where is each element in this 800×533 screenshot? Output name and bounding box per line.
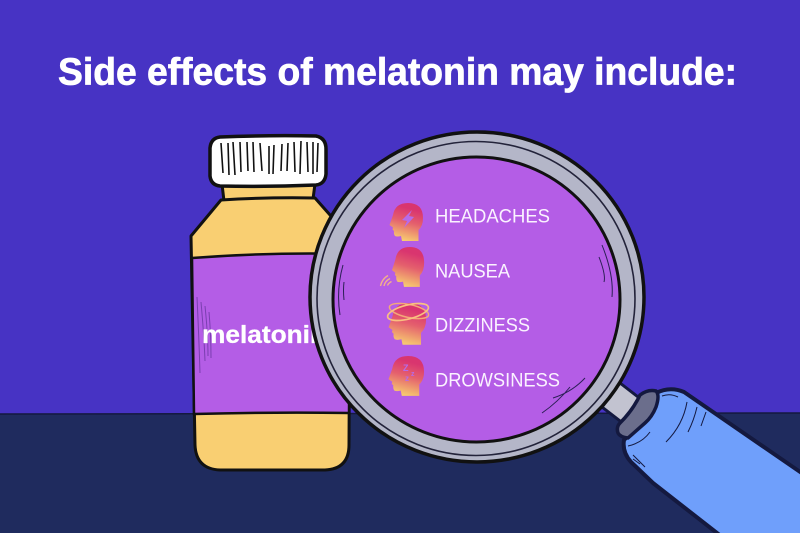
symptom: nausea [380, 247, 510, 287]
icon: head with lightning [390, 203, 423, 241]
icon: head with z letters: z [405, 374, 409, 383]
icon: head with z letters: z [411, 371, 415, 378]
label: NAUSEA [435, 260, 510, 282]
symptom: drowsiness [389, 356, 560, 396]
lens glass [333, 157, 620, 442]
label: DROWSINESS [435, 370, 560, 392]
bottle body [191, 198, 350, 470]
icon: head with z letters: Z [403, 363, 409, 373]
title: Side effects of melatonin may include: [58, 52, 737, 94]
melatonin bottle [191, 136, 350, 470]
handle grip [624, 389, 800, 533]
bottle neck [222, 184, 315, 201]
bottle cap [210, 136, 326, 186]
label: DIZZINESS [435, 315, 530, 337]
symptom: headaches [390, 203, 550, 241]
symptom: dizziness [386, 300, 530, 345]
handle collar [617, 390, 658, 438]
background wall [0, 0, 800, 416]
icon: head with vomit lines [380, 247, 424, 287]
bottle label [192, 254, 350, 414]
magnifying glass lens [310, 132, 644, 462]
lens rim [310, 132, 644, 462]
table [0, 413, 800, 533]
handle connector [602, 383, 642, 424]
icon: head with z letters [389, 356, 424, 396]
label: HEADACHES [435, 206, 550, 228]
glass scratches [339, 245, 612, 413]
icon: head with orbit rings [386, 300, 430, 345]
magnifying glass handle [602, 383, 800, 533]
handle wrinkles [628, 395, 706, 467]
bottle label text: melatonin [202, 321, 326, 349]
lens inner rim lines [317, 142, 635, 456]
label streaks [197, 297, 211, 373]
